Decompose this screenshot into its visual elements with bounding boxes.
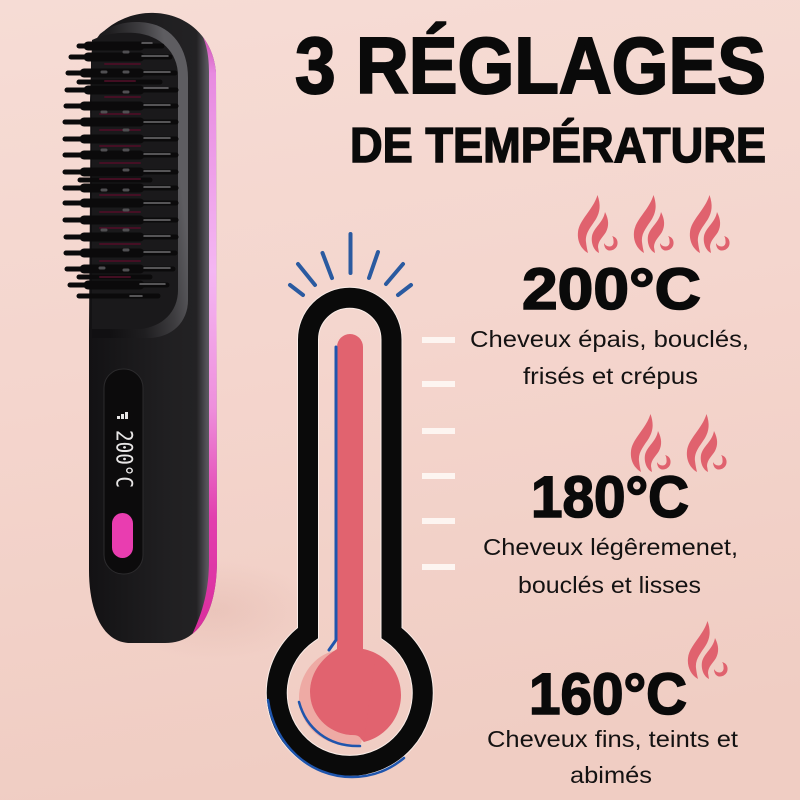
brush pink edge stripe — [192, 37, 217, 634]
brush head bevel — [90, 22, 188, 338]
bristles — [65, 43, 176, 296]
pale bulb crescent — [299, 651, 362, 746]
brush display panel — [104, 369, 143, 574]
temperature: 180°C: 180°C — [531, 465, 689, 530]
brush power button — [112, 513, 133, 558]
panel: 180°C setting — [483, 414, 738, 598]
description: 160°C: Cheveux fins, teints et — [487, 726, 739, 752]
icon: three flames — [578, 195, 730, 253]
temperature: 200°C: 200°C — [522, 257, 701, 322]
mercury column and bulb — [332, 334, 401, 742]
description: 160°C — [487, 726, 739, 788]
panel: 200°C setting — [470, 195, 749, 389]
description: 180°C: bouclés et lisses — [518, 572, 701, 598]
description: 200°C — [470, 326, 749, 389]
heading: 3 réglages: 3 RÉGLAGES — [295, 21, 766, 110]
title — [295, 21, 766, 173]
heading: de température: DE TEMPÉRATURE — [350, 119, 766, 173]
product: hair straightening brush — [65, 13, 222, 643]
description: 180°C — [483, 534, 738, 598]
temperature scale ticks — [422, 337, 455, 570]
icon: two flames — [631, 414, 727, 472]
signal bars — [117, 412, 128, 419]
thermometer outline — [277, 298, 423, 766]
icon: one flame — [688, 621, 728, 679]
blue accent lines — [268, 347, 404, 777]
temperature: 160°C: 160°C — [529, 662, 687, 727]
brush body — [89, 13, 217, 643]
thermometer outline highlight — [277, 298, 423, 766]
mercury bulb fill — [310, 649, 375, 742]
heat rays — [290, 234, 411, 295]
display temperature: 200°C — [110, 430, 136, 488]
description: 200°C: Cheveux épais, bouclés, — [470, 326, 749, 352]
description: 200°C: frisés et crépus — [523, 363, 698, 389]
thermometer illustration — [268, 234, 423, 777]
description: 180°C: Cheveux légêremenet, — [483, 534, 738, 560]
description: 160°C: abimés — [570, 762, 652, 788]
brush head bristle bed — [92, 33, 178, 329]
panel: 160°C setting — [487, 621, 739, 788]
